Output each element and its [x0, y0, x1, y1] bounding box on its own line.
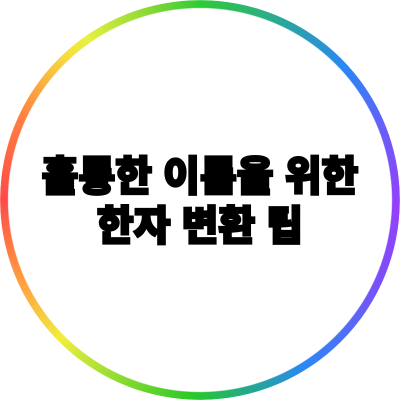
title: 훌륭한 이름을 위한: [42, 155, 358, 200]
title: [42, 154, 358, 249]
title: 한자 변환 팁: [97, 204, 303, 249]
